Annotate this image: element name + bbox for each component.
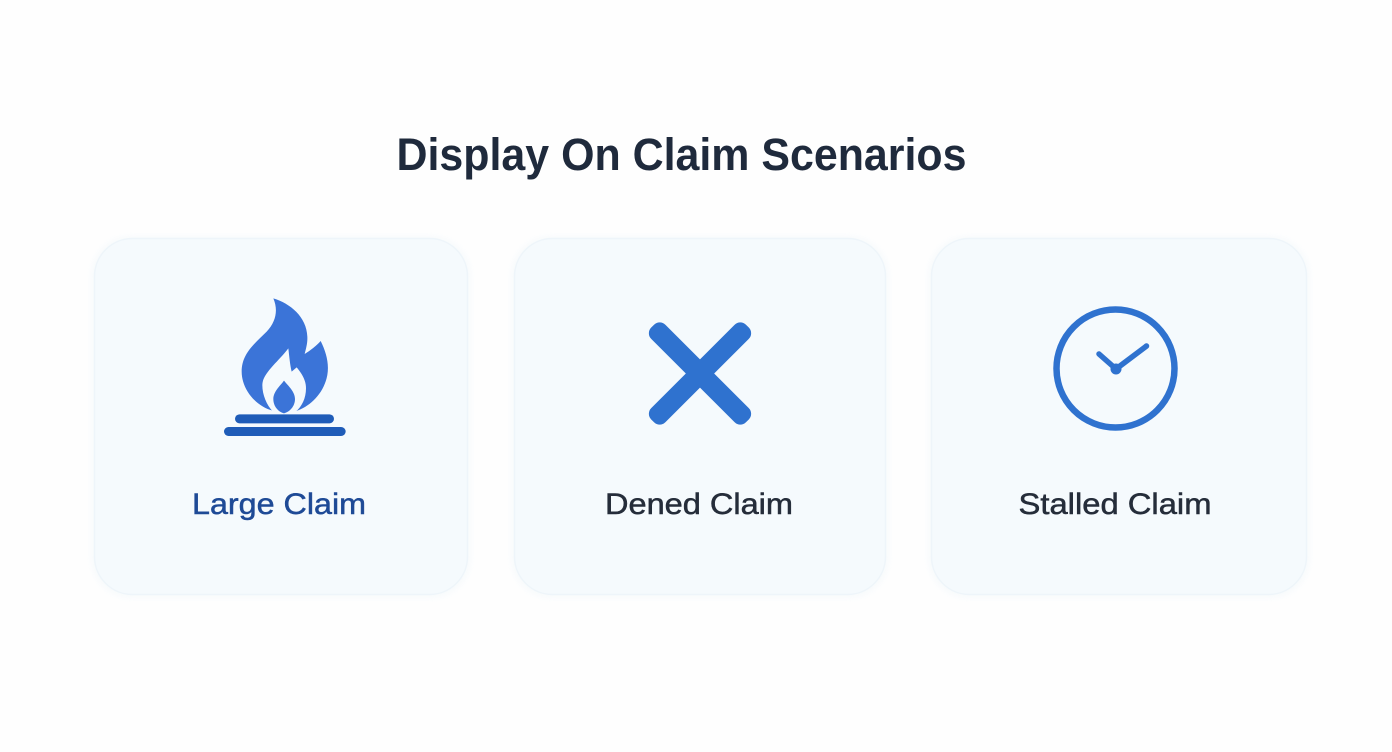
label: large claim: Large Claim (192, 488, 366, 521)
panel: large claim (91, 236, 471, 598)
panel: denied claim (511, 236, 889, 598)
icon: flame (224, 298, 346, 436)
label: denied claim: Dened Claim (605, 488, 793, 521)
icon: cross (605, 279, 795, 468)
icon: clock (1056, 310, 1174, 428)
panel: stalled claim (928, 236, 1310, 598)
title: Display On Claim Scenarios (396, 129, 966, 180)
label: stalled claim: Stalled Claim (1018, 488, 1212, 521)
